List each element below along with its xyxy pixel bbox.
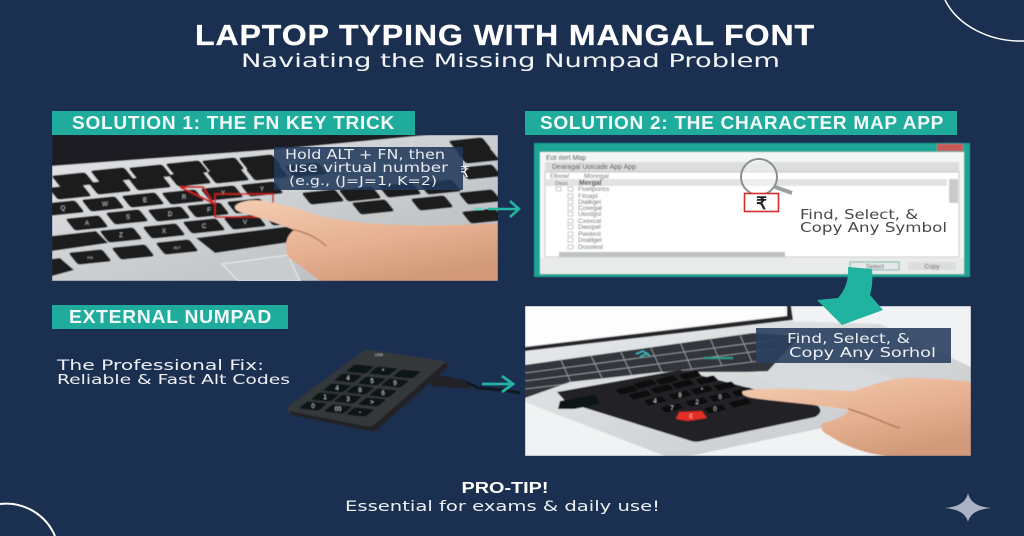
key labels: FN [87,255,93,260]
key labels: F [207,208,211,214]
text: find select copy: Copy Any Symbol [800,221,947,236]
key labels: D [168,212,173,218]
key labels: E [143,198,147,204]
arrow: numpad to laptop [482,376,513,392]
key labels: Q [61,206,66,212]
window text: Dsus [555,181,568,187]
laptop base [525,321,971,456]
numpad key labels: 0 [713,407,717,413]
pro tip text: Essential for exams & daily use! [345,499,660,515]
window text: Pwotesl [578,231,601,238]
icon: rupee symbol highlighted [744,194,778,213]
arrow: solution 1 to solution 2 [474,201,519,217]
panel: character map window [534,143,970,277]
key labels [61,187,264,260]
window text: Uiostgsl [578,211,602,218]
numpad key labels: 8 [678,393,682,399]
icon: rupee symbol highlighted: ₹ [756,194,767,213]
callout: fn key instructions [274,147,470,190]
laptop screen bezel [52,135,428,166]
numpad key labels: 4 [653,399,657,405]
laptop screen edge [525,306,793,351]
list checkboxes [556,187,573,249]
numpad key labels: 7 [670,406,674,412]
key labels: V [243,220,247,226]
subtitle: Naviating the Missing Numpad Problem [241,50,780,72]
red clear key: C [689,414,693,420]
red clear key [676,411,707,421]
key labels: A [85,221,89,227]
callout: find select copy on photo: Copy Any Sorhol [789,346,936,361]
numpad key labels: 6 [381,391,385,397]
panel: laptop with numpad photo [525,306,971,456]
callout: fn key instructions: ₹ [460,163,470,181]
decorative arc: top right [945,0,1024,41]
key labels: Y [221,191,225,197]
glyph highlights on keyboard [636,351,650,357]
text: professional fix [56,358,290,388]
text: professional fix: Reliable & Fast Alt Codes [57,372,290,388]
hand pressing numpad [742,378,971,456]
numpad key labels: * [701,388,704,394]
heading: solution 2: SOLUTION 2: THE CHARACTER MAP APP [540,112,944,133]
buttons: select and copy: Copy [924,264,940,270]
numpad key labels: 9 [393,381,397,387]
text: find select copy [800,208,947,236]
window text: Mergal [579,180,602,187]
window text: Coxegal [578,205,602,212]
key labels: Z [119,233,123,239]
window text [546,155,636,251]
text: professional fix: The Professional Fix: [56,358,264,374]
decorative arc: bottom left [0,504,55,536]
numpad on laptop [557,370,820,442]
buttons: select and copy: Select [866,264,884,270]
trackpad [222,255,300,281]
numpad keys [615,370,755,414]
laptop keyboard [525,333,800,398]
heading: external numpad [52,305,288,329]
numpad key labels: 5 [370,379,374,385]
window text: Eot ıtert Map [546,155,586,162]
numpad key labels [653,388,722,413]
callout: fn key instructions: use virtual number [288,161,449,176]
icon: sparkle star [944,493,992,522]
heading: solution 1: SOLUTION 1: THE FN KEY TRICK [72,113,395,133]
numpad key labels: > [370,400,374,406]
trackpad [748,370,768,373]
numpad key labels: * [382,369,385,375]
red highlight marker [180,187,273,217]
key labels: C [202,224,207,230]
title: LAPTOP TYPING WITH MANGAL FONT [195,20,815,52]
icon: external numpad device [288,350,520,431]
key labels: ALT [173,245,181,250]
numpad key labels: - [359,410,361,416]
window text: Dearagal Uoicade App App [552,164,636,171]
icon: magnifying glass [741,159,792,195]
numpad key labels: 4 [346,376,350,382]
numpad key labels: 4 [335,386,339,392]
numpad key labels [311,352,397,416]
key labels: W [102,202,108,208]
window text: Dwsipel [578,224,601,231]
numpad key labels: USB [375,352,383,357]
window text: Monngal [584,173,609,180]
window text: Fitoapl [578,193,598,200]
numpad key labels: 0 [718,395,722,401]
callout: find select copy on photo [756,328,951,363]
key labels: X [162,229,166,235]
window text: Floelporics [578,186,610,193]
callout: fn key instructions: Hold ALT + FN, then [285,148,445,163]
arrow: character map to numpad photo [817,267,883,325]
numpad key labels: 8 [358,388,362,394]
callout: fn key instructions: (e.g., (J=J=1, K=2) [289,173,437,188]
numpad key labels: 1 [323,395,327,401]
window text: Elloow/ [550,174,570,180]
window text: Cxexcal [578,218,602,225]
text: find select copy: Find, Select, & [800,208,918,223]
numpad key labels: 00 [335,407,342,413]
window text: Dosslest [578,244,603,251]
numpad key labels: 3 [346,397,350,403]
pro tip heading: PRO-TIP! [462,480,548,497]
key labels: Y [260,187,264,193]
heading: external numpad: EXTERNAL NUMPAD [69,307,272,327]
keyboard keys [41,137,505,276]
key labels: S [126,215,130,221]
window text: Doatlgel [578,237,602,244]
numpad keys [299,364,421,417]
window text: Dialkgel [578,199,602,206]
numpad key labels: 0 [311,404,315,410]
hand pressing key [235,200,498,281]
buttons: select and copy [850,262,956,270]
callout: find select copy on photo: Find, Select, & [787,332,910,347]
numpad key labels: 2 [695,400,699,406]
panel: solution 1 photo [41,135,505,281]
key labels: R [182,195,187,201]
